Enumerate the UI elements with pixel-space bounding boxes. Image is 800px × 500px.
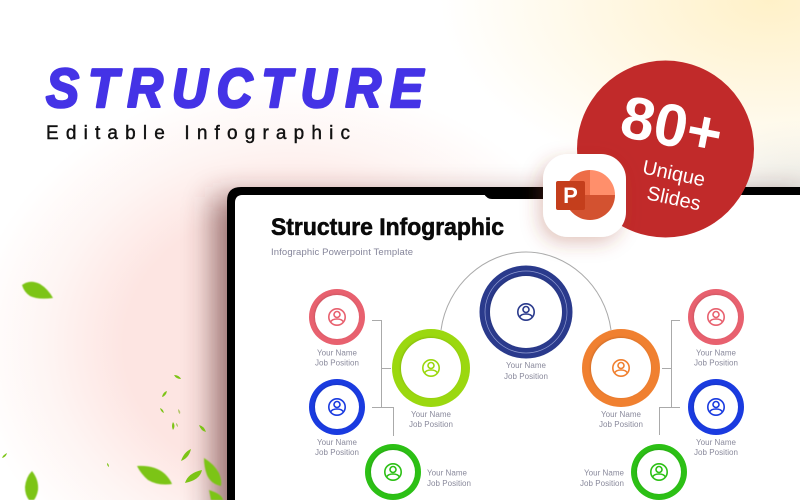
node: lime: Your Name [411, 410, 452, 419]
node: pink left: Job Position [315, 358, 359, 368]
icon: PowerPoint app [543, 154, 626, 237]
title: STRUCTURE: STRUCTURE [46, 59, 425, 120]
connector lines [372, 252, 680, 436]
icon: PowerPoint app: P [563, 183, 578, 208]
node: green right [580, 444, 687, 500]
node: pink right: Your Name [696, 348, 737, 358]
node: pink left: Your Name [317, 348, 358, 358]
node: green right: Job Position [580, 479, 624, 488]
laptop drop shadow [213, 197, 800, 500]
node: blue right: Job Position [694, 448, 738, 457]
node: green left [365, 444, 471, 500]
badge label [641, 157, 707, 215]
node: center navy: Your Name [506, 361, 547, 370]
node: green left: Your Name [427, 468, 468, 478]
slide heading: Structure Infographic [271, 214, 504, 241]
node: pink right [688, 289, 744, 368]
node: pink right: Job Position [694, 358, 738, 368]
node: lime: Job Position [409, 420, 453, 429]
node: blue right [688, 379, 744, 457]
laptop screen frame [227, 187, 800, 500]
node: orange: Job Position [599, 420, 643, 429]
badge label: Slides [645, 183, 703, 215]
node: lime [392, 329, 470, 429]
node: center navy [480, 266, 572, 381]
badge: 80+ unique slides [577, 60, 754, 238]
node: green right: Your Name [584, 468, 625, 478]
node: blue left: Job Position [315, 448, 359, 457]
node: orange: Your Name [601, 410, 642, 419]
decorative green leaves [2, 282, 223, 500]
node: green left: Job Position [427, 479, 471, 488]
badge label: Unique [641, 157, 707, 191]
node: orange [582, 329, 660, 429]
badge number: 80+ [616, 83, 728, 168]
node: blue left [309, 379, 365, 457]
node: blue right: Your Name [696, 438, 737, 447]
subtitle: Editable Infographic [46, 123, 350, 144]
node: pink left [309, 289, 365, 368]
slide subheading: Infographic Powerpoint Template [271, 247, 413, 258]
node: blue left: Your Name [317, 438, 358, 447]
node: center navy: Job Position [504, 372, 548, 381]
